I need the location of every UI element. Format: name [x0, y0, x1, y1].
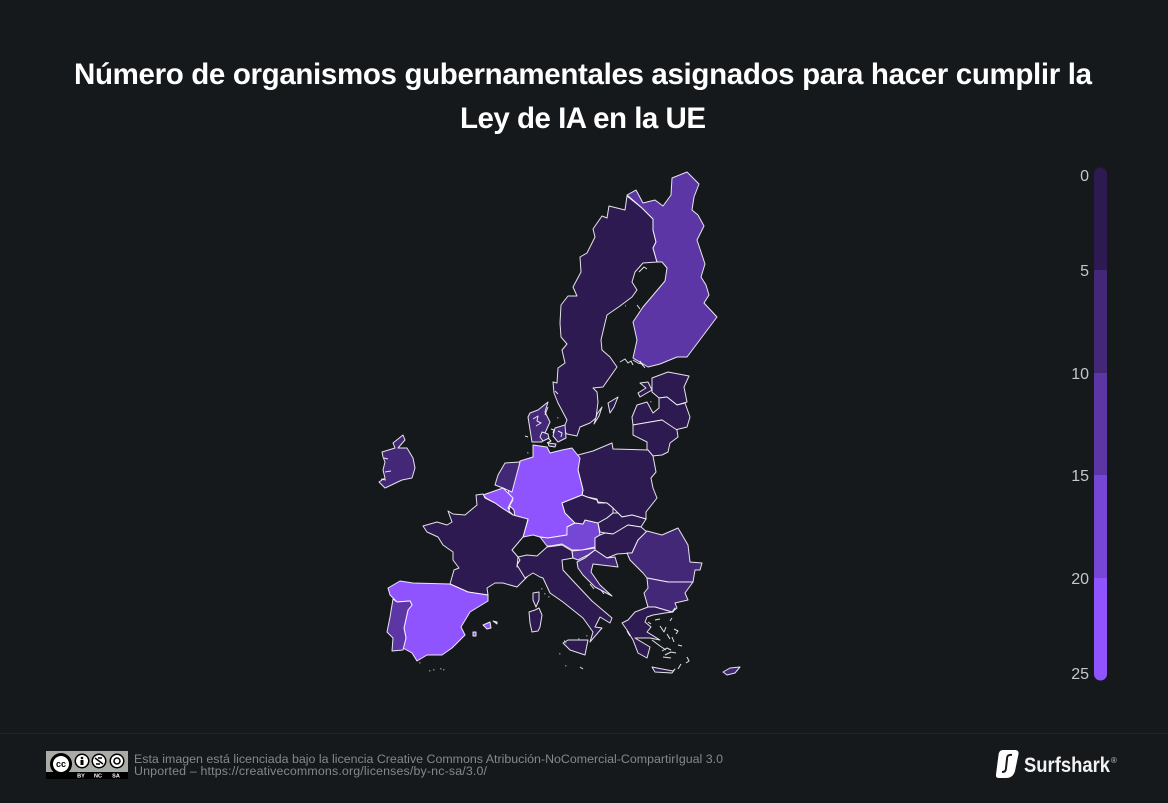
- country: Croatia: [577, 550, 618, 596]
- icon: Creative Commons badge: cc: [56, 759, 66, 769]
- country: Luxembourg: [509, 506, 515, 517]
- country: Cyprus: [723, 667, 740, 675]
- country: Hungary: [595, 525, 647, 558]
- title: [74, 58, 1093, 135]
- icon: Creative Commons badge: SA: [112, 774, 120, 780]
- islands and coast detail: [381, 267, 689, 669]
- country: Denmark: [528, 402, 566, 447]
- country: Poland: [578, 443, 657, 519]
- country: France: [423, 494, 528, 595]
- country: Czechia: [562, 495, 613, 524]
- country: Lithuania: [633, 420, 678, 456]
- icon: Creative Commons badge: BY: [77, 774, 85, 780]
- license text: Esta imagen está licenciada bajo la licencia Creative Commons Atribución-NoComercial-CompartirIgual 3.0: [134, 752, 723, 766]
- title: Número de organismos gubernamentales asignados para hacer cumplir la: [74, 58, 1093, 91]
- country: Austria: [540, 520, 600, 550]
- logo: Surfshark: ®: [1111, 756, 1117, 765]
- country: Portugal: [387, 599, 412, 651]
- logo: Surfshark: Surfshark: [1024, 754, 1110, 777]
- country: Estonia: [638, 372, 689, 405]
- country: Belgium: [483, 488, 515, 517]
- legend labels: 20: [1071, 571, 1089, 588]
- legend labels: 5: [1080, 263, 1089, 280]
- country: Sweden islands: [594, 397, 618, 424]
- country: Italy: [517, 545, 612, 655]
- legend labels: 15: [1071, 468, 1089, 485]
- license text: [134, 752, 723, 778]
- country: Spain: [388, 581, 497, 661]
- legend labels: 25: [1071, 666, 1089, 683]
- title: Ley de IA en la UE: [460, 102, 706, 135]
- country: Latvia: [632, 397, 690, 430]
- footer divider: [0, 733, 1168, 734]
- license text: Unported – https://creativecommons.org/licenses/by-nc-sa/3.0/: [134, 764, 488, 778]
- small islets: [419, 305, 652, 672]
- map: European Union countries: [379, 172, 740, 675]
- country: Finland: [627, 172, 717, 367]
- country: Slovakia: [598, 513, 646, 534]
- country: Slovenia: [572, 548, 595, 560]
- country: Bulgaria: [644, 578, 693, 612]
- icon: Surfshark mark: [996, 750, 1019, 778]
- legend labels: [1071, 168, 1089, 683]
- legend labels: 10: [1071, 366, 1089, 383]
- legend bar: [1094, 168, 1107, 681]
- legend labels: 0: [1080, 168, 1089, 185]
- icon: Creative Commons badge: [46, 751, 128, 780]
- country: Netherlands: [495, 462, 520, 492]
- icon: Creative Commons badge: NC: [94, 774, 102, 780]
- country: Sweden: [553, 196, 657, 436]
- legend: colour scale: [1071, 168, 1107, 683]
- country: Romania: [627, 528, 702, 582]
- logo: Surfshark: [996, 750, 1117, 778]
- country: Ireland: [379, 435, 415, 488]
- country: Greece: [622, 607, 675, 673]
- country: Germany: [508, 445, 583, 538]
